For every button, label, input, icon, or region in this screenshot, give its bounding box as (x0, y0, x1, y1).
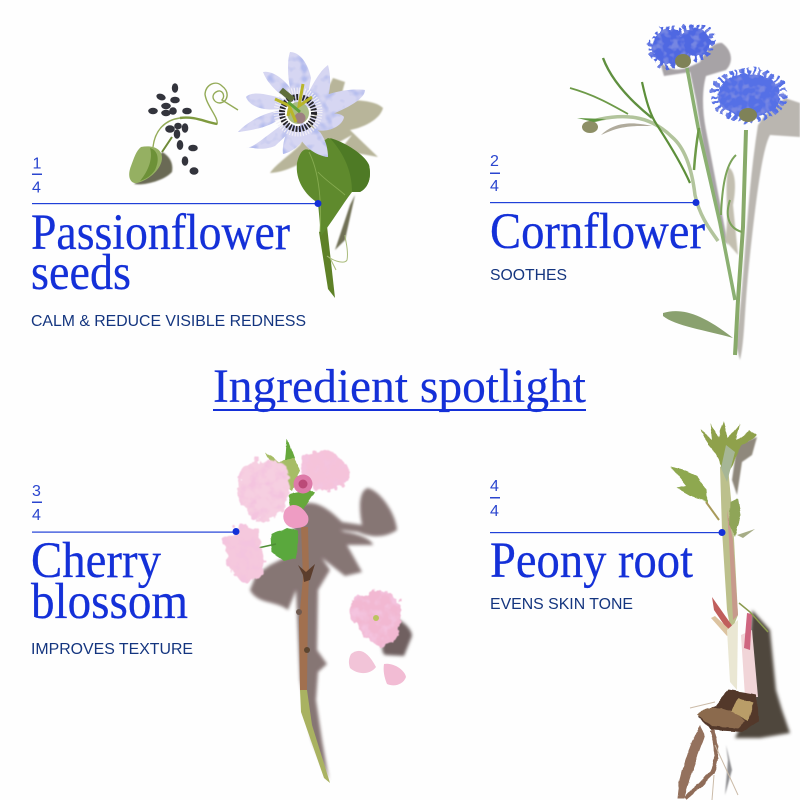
stem (720, 467, 738, 632)
shadows (270, 78, 383, 173)
pointer line (490, 529, 726, 536)
illustration: cherry blossom (224, 439, 412, 783)
panel: peony root (490, 478, 726, 613)
fraction 1/4: 1 (33, 156, 42, 172)
fraction 4/4 (490, 478, 500, 520)
panel: cherry blossom (31, 483, 240, 658)
buds (294, 474, 312, 494)
leaf (297, 138, 370, 236)
fraction 2/4: 4 (490, 178, 499, 195)
heading: Ingredient spotlight (213, 360, 587, 413)
corona (277, 91, 319, 133)
illustration: peony root (670, 421, 790, 800)
loose petals (349, 651, 376, 673)
illustration: cornflower (570, 26, 800, 360)
crown leaves (670, 421, 757, 537)
blossoms (224, 451, 402, 646)
benefit: CALM & REDUCE VISIBLE REDNESS (31, 313, 306, 330)
benefit: IMPROVES TEXTURE (31, 641, 193, 658)
fraction 4/4: 4 (490, 478, 499, 495)
shadows (660, 43, 731, 245)
stems (687, 68, 735, 300)
fraction 4/4: 4 (490, 503, 499, 520)
leaves (266, 439, 315, 561)
fraction 2/4: 2 (490, 153, 499, 170)
lower shoots (712, 597, 733, 632)
fraction 1/4: 4 (32, 180, 41, 196)
benefit: SOOTHES (490, 267, 567, 284)
pointer line (32, 528, 240, 535)
panel: passionflower seeds (31, 156, 322, 330)
pod and tendril (153, 83, 238, 147)
shadows (250, 488, 397, 780)
pointer line (32, 200, 322, 207)
name: seeds (31, 245, 131, 301)
name: Cherry (31, 533, 161, 589)
pointer line (490, 199, 700, 206)
name: blossom (31, 574, 188, 630)
stem (319, 226, 335, 298)
fraction 3/4 (32, 483, 42, 524)
name: Peony root (490, 533, 693, 589)
seeds (148, 83, 198, 175)
panel: cornflower (490, 153, 705, 284)
name: Passionflower (31, 205, 290, 261)
fraction 1/4 (32, 156, 42, 196)
fraction 3/4: 4 (32, 507, 41, 524)
illustration: passionflower and seeds (129, 52, 383, 298)
bottom leaf (663, 311, 733, 338)
fraction 3/4: 3 (32, 483, 41, 500)
shadows (732, 437, 757, 495)
bud (582, 121, 598, 133)
fraction 2/4 (490, 153, 500, 195)
name: Cornflower (490, 204, 705, 260)
root mass (677, 690, 758, 798)
stem (299, 527, 309, 690)
petals (238, 52, 365, 157)
flower heads (651, 26, 784, 119)
benefit: EVENS SKIN TONE (490, 596, 633, 613)
